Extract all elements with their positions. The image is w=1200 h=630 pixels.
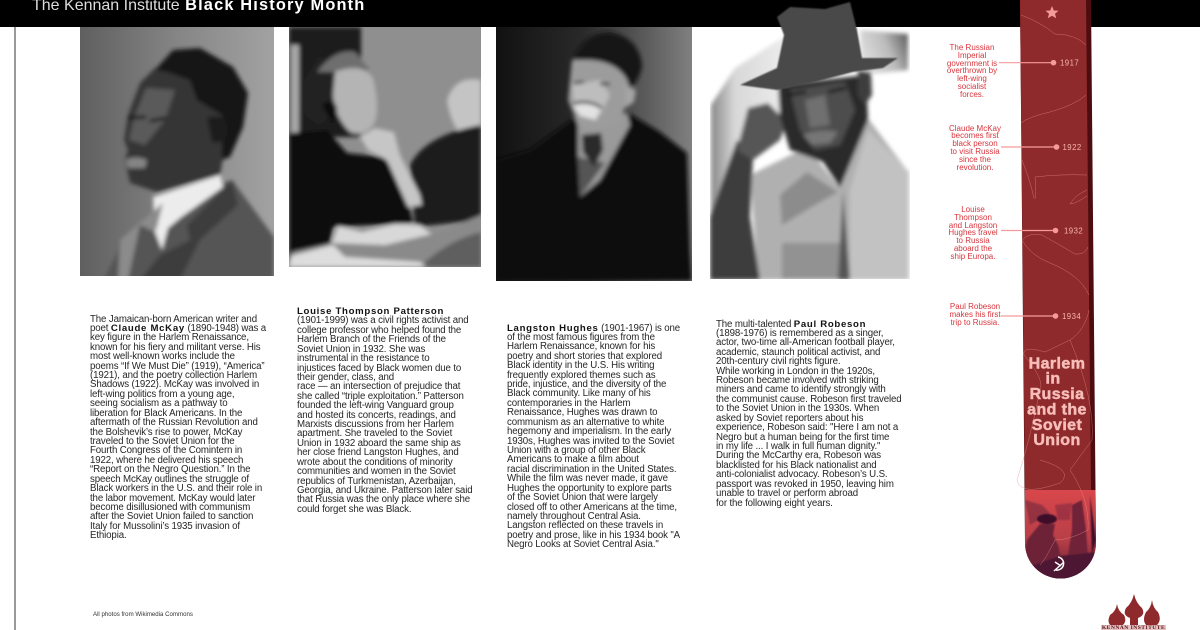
timeline note 1922: to visit Russia: [950, 147, 1000, 156]
bio: Langston Hughes: [507, 322, 680, 550]
bio: Claude McKay: 1922, where he delivered his speech: [90, 455, 243, 466]
bio: Louise Thompson Patterson: and hosted its concerts, readings, and: [297, 410, 456, 421]
timeline note 1934: [949, 302, 1001, 327]
timeline note 1917: overthrown by: [947, 66, 997, 75]
bio: Claude McKay: poet Claude McKay (1890-1948) was a: [90, 323, 266, 334]
timeline note 1922: becomes first: [951, 131, 999, 140]
bio: Langston Hughes: pride, injustice, and the diversity of the: [507, 379, 666, 390]
bio: Louise Thompson Patterson: apartment. She traveled to the Soviet: [297, 428, 452, 439]
bio: Claude McKay: poems “If We Must Die” (1919), “America”: [90, 361, 264, 372]
bio: Louise Thompson Patterson: Union in 1932 aboard the same ship as: [297, 438, 461, 449]
bio: Louise Thompson Patterson: she called “triple exploitation.” Patterson: [297, 391, 464, 402]
bio: Claude McKay: The Jamaican-born American writer and: [90, 314, 257, 324]
timeline note 1934: trip to Russia.: [951, 318, 999, 327]
bio: Langston Hughes: Black identity in the U.S. His writing: [507, 360, 654, 371]
bio: Langston Hughes: of the Soviet Union that were largely: [507, 492, 658, 503]
bio: Louise Thompson Patterson: (1901-1999) was a civil rights activist and: [297, 315, 469, 326]
timeline years: 1934: [1062, 312, 1081, 321]
timeline note 1917: socialist: [958, 82, 986, 91]
bio: Claude McKay: aftermath of the Russian Revolution and: [90, 417, 258, 428]
bio: Louise Thompson Patterson: race — an intersection of prejudice that: [297, 381, 460, 392]
bio: Paul Robeson: Robeson became involved with striking: [716, 375, 879, 386]
timeline note 1917: The Russian: [950, 43, 994, 52]
icon: hammer and sickle: [1054, 557, 1064, 571]
bio: Langston Hughes: Americans to make a film about: [507, 454, 639, 465]
photo credit: All photos from Wikimedia Commons: [93, 611, 193, 618]
timeline bar: [1020, 0, 1100, 580]
bio: Paul Robeson: passport was revoked in 1950, leaving him: [716, 479, 894, 490]
bar illustration: [1025, 490, 1096, 578]
bio: Claude McKay: the labor movement. McKay would later: [90, 493, 255, 504]
bio: Louise Thompson Patterson: injustices faced by Black women due to: [297, 363, 461, 374]
timeline note 1932: Louise: [961, 205, 985, 214]
bio: Langston Hughes: frequently explored themes such as: [507, 370, 656, 381]
bio: Louise Thompson Patterson: founded the left-wing Vanguard group: [297, 400, 454, 411]
bio: Claude McKay: Shadows (1922). McKay was involved in: [90, 379, 259, 390]
timeline note 1917: forces.: [960, 90, 984, 99]
bio: Claude McKay: key figure in the Harlem Renaissance,: [90, 332, 249, 343]
bio: Louise Thompson Patterson: college professor who helped found the: [297, 325, 461, 336]
bio: Claude McKay: traveled to the Soviet Union for the: [90, 436, 234, 447]
timeline note 1922: black person: [952, 139, 998, 148]
bio: Louise Thompson Patterson: could forget she was Black.: [297, 504, 411, 515]
bio: Langston Hughes: communism as an alternative to white: [507, 417, 664, 428]
bio: Claude McKay: Fourth Congress of the Comintern in: [90, 445, 242, 456]
bar title: Union: [1033, 432, 1081, 449]
bio: Claude McKay: Ethiopia.: [90, 530, 127, 541]
bio: Louise Thompson Patterson: Georgia, and Ukraine. Patterson later said: [297, 485, 472, 496]
bio: Paul Robeson: [716, 318, 902, 509]
timeline note 1922: [949, 124, 1001, 172]
bio: Louise Thompson Patterson: Louise Thompson Patterson: [297, 306, 444, 317]
bio: Paul Robeson: the communist cause. Robeson first traveled: [716, 394, 902, 405]
timeline years: [1060, 58, 1083, 321]
bio: Langston Hughes: racial discrimination in the United States.: [507, 464, 676, 475]
bio: Louise Thompson Patterson: Harlem Branch of the Friends of the: [297, 334, 446, 345]
bio: Claude McKay: the Bolshevik’s rise to power, McKay: [90, 427, 242, 438]
bio: Claude McKay: known for his fiery and militant verse. His: [90, 342, 260, 353]
bio: Louise Thompson Patterson: communities and women in the Soviet: [297, 466, 456, 477]
bio: Claude McKay: after the Soviet Union failed to sanction: [90, 511, 253, 522]
timeline note 1922: since the: [959, 155, 991, 164]
bio: Langston Hughes: Hughes the opportunity to explore parts: [507, 483, 672, 494]
bio: Claude McKay: become disillusioned with communism: [90, 502, 250, 513]
bar title: in: [1045, 370, 1061, 388]
bio: Paul Robeson: experience, Robeson said: "Here I am not a: [716, 422, 898, 433]
map outline lines: [1017, 15, 1092, 565]
bio: Louise Thompson Patterson: [297, 306, 472, 515]
bio: Claude McKay: left-wing politics from a young age,: [90, 389, 234, 400]
bio: Claude McKay: Italy for Mussolini’s 1935 invasion of: [90, 521, 240, 532]
bio: Paul Robeson: During the McCarthy era, Robeson was: [716, 450, 881, 461]
timeline note 1917: left-wing: [957, 74, 987, 83]
bio: Langston Hughes: Harlem Renaissance, known for his: [507, 341, 655, 352]
header bar: [0, 0, 1200, 27]
bio: Claude McKay: (1921), and the poetry collection Harlem: [90, 370, 257, 381]
bio: Louise Thompson Patterson: that Russia was the only place where she: [297, 494, 470, 505]
timeline note 1934: Paul Robeson: [950, 302, 1000, 311]
bar title: Russia: [1030, 386, 1084, 403]
photo: Paul Robeson: [710, 2, 910, 280]
bio: Langston Hughes: of the most famous figures from the: [507, 332, 655, 343]
bio: Paul Robeson: actor, two-time all-American football player,: [716, 337, 895, 348]
bio: Louise Thompson Patterson: her close friend Langston Hughes, and: [297, 447, 459, 458]
left rule: [14, 27, 16, 630]
bar title: Soviet: [1032, 417, 1082, 434]
bio: Langston Hughes: hegemony and imperialism. In the early: [507, 426, 671, 437]
bio: Paul Robeson: unable to travel or perform abroad: [716, 488, 858, 499]
timeline note 1934: makes his first: [949, 310, 1001, 319]
bio: Langston Hughes: Langston Hughes (1901-1967) is one: [507, 322, 680, 334]
bio: Langston Hughes: closed off to other Americans at the time,: [507, 502, 677, 513]
photo: Louise Thompson Patterson: [289, 27, 481, 267]
timeline years: 1922: [1062, 143, 1082, 152]
timeline note 1932: to Russia: [956, 236, 990, 245]
timeline note 1922: Claude McKay: [949, 124, 1001, 132]
timeline note 1932: [948, 205, 998, 261]
timeline note 1917: government is: [947, 59, 997, 68]
bio: Paul Robeson: academic, staunch political activist, and: [716, 347, 880, 358]
bio: Louise Thompson Patterson: their gender, class, and: [297, 372, 394, 383]
bio: Claude McKay: seeing socialism as a pathway to: [90, 398, 227, 409]
bio: Louise Thompson Patterson: instrumental in the resistance to: [297, 353, 429, 364]
bio: Paul Robeson: 20th-century civil rights figure.: [716, 356, 840, 367]
bio: Langston Hughes: poetry and short stories that explored: [507, 351, 662, 362]
bio: Paul Robeson: in my life ... I walk in full human dignity.": [716, 441, 880, 452]
timeline note 1917: [947, 43, 998, 99]
bio: Paul Robeson: for the following eight years.: [716, 498, 833, 509]
bio: Claude McKay: most well-known works include the: [90, 351, 235, 362]
bio: Langston Hughes: namely throughout Central Asia.: [507, 511, 641, 522]
bio: Langston Hughes: Union with a group of other Black: [507, 445, 645, 456]
bio: Louise Thompson Patterson: Marxists discussions from her Harlem: [297, 419, 454, 430]
bio: Louise Thompson Patterson: republics of Turkmenistan, Azerbaijan,: [297, 476, 456, 487]
timeline note 1932: and Langston: [949, 221, 997, 230]
bar title: and the: [1027, 402, 1087, 418]
bio: Paul Robeson: asked by Soviet reporters about his: [716, 413, 863, 424]
bio: Paul Robeson: The multi-talented Paul Robeson: [716, 318, 866, 330]
bar title: Harlem: [1029, 356, 1085, 372]
bio: Langston Hughes: contemporaries in the Harlem: [507, 398, 630, 409]
bio: Louise Thompson Patterson: wrote about the conditions of minority: [297, 457, 453, 468]
timeline note 1932: Thompson: [954, 213, 992, 222]
photo: Langston Hughes: [496, 27, 692, 281]
bio: Paul Robeson: While working in London in the 1920s,: [716, 366, 875, 377]
bio: Paul Robeson: miners and came to identify strongly with: [716, 384, 886, 395]
bio: Claude McKay: Black workers in the U.S. and their role in: [90, 483, 262, 494]
photo: Claude McKay: [80, 27, 274, 280]
timeline note 1932: Hughes travel: [948, 228, 998, 237]
bio: Langston Hughes: 1930s, Hughes was invited to the Soviet: [507, 436, 674, 447]
bio: Paul Robeson: Negro but a human being for the first time: [716, 432, 889, 443]
bio: Paul Robeson: to the Soviet Union in the 1930s. When: [716, 403, 879, 414]
bio: Langston Hughes: Langston reflected on these travels in: [507, 520, 663, 531]
bio: Paul Robeson: blacklisted for his Black nationalist and: [716, 460, 877, 471]
bio: Claude McKay: liberation for Black Americans. In the: [90, 408, 242, 419]
bio: Langston Hughes: Black community. Like many of his: [507, 388, 651, 399]
bio: Langston Hughes: Negro Looks at Soviet Central Asia.": [507, 539, 659, 550]
bio: Claude McKay: speech McKay outlines the struggle of: [90, 474, 249, 485]
timeline connectors and dots: [999, 60, 1059, 319]
timeline note 1932: aboard the: [954, 244, 992, 253]
bio: Louise Thompson Patterson: Soviet Union in 1932. She was: [297, 344, 425, 355]
icon: star: [1046, 6, 1058, 18]
bio: Claude McKay: [90, 314, 266, 541]
timeline note 1917: Imperial: [958, 51, 986, 60]
timeline years: 1917: [1060, 58, 1079, 68]
bar title: [1027, 356, 1087, 449]
timeline note 1922: revolution.: [957, 163, 993, 172]
bio: Paul Robeson: anti-colonialist advocacy. Robeson’s U.S.: [716, 469, 887, 480]
bio: Langston Hughes: While the film was never made, it gave: [507, 473, 668, 484]
timeline note 1932: ship Europa.: [951, 252, 995, 261]
timeline years: 1932: [1064, 226, 1083, 236]
bio: Langston Hughes: poetry and prose, like in his 1934 book "A: [507, 530, 680, 541]
bio: Paul Robeson: (1898-1976) is remembered as a singer,: [716, 328, 883, 339]
bio: Claude McKay: “Report on the Negro Question.” In the: [90, 464, 250, 475]
logo: [1108, 594, 1160, 625]
bio: Langston Hughes: Renaissance, Hughes was drawn to: [507, 407, 657, 418]
